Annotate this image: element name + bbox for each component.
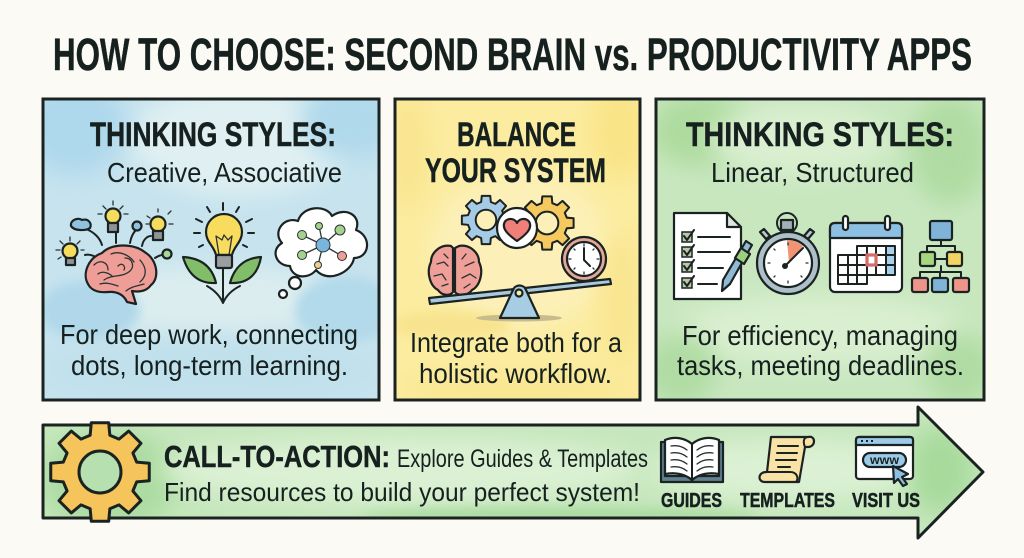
panel body text: tasks, meeting deadlines. <box>677 350 964 381</box>
call-to-action heading: CALL-TO-ACTION: <box>164 439 390 474</box>
label: guides: GUIDES <box>661 490 722 512</box>
panel heading: THINKING STYLES: <box>686 116 954 154</box>
icon: templates scroll <box>759 437 814 482</box>
icon: org chart <box>912 221 969 292</box>
icon: gears with heart <box>462 196 574 250</box>
panel body text: For efficiency, managing <box>682 320 958 351</box>
icon: calendar <box>830 216 902 292</box>
panel body text: Integrate both for a <box>410 327 622 358</box>
icon: visit us browser: www <box>869 453 900 467</box>
arrow banner: call to action <box>40 407 984 538</box>
call-to-action body text: Find resources to build your perfect system! <box>164 477 640 507</box>
icon: guides book <box>661 438 723 482</box>
call-to-action heading: Explore Guides & Templates <box>397 445 648 473</box>
panel body text: dots, long-term learning. <box>71 350 348 381</box>
icon: thought cloud network <box>276 208 367 298</box>
icon: lightbulb sprout <box>183 203 261 303</box>
icon: seesaw with brain and clock <box>429 237 611 322</box>
panel body text <box>410 327 622 389</box>
panel subheading: Linear, Structured <box>711 157 914 188</box>
panel heading: THINKING STYLES: <box>90 116 336 154</box>
panel heading: YOUR SYSTEM <box>425 152 606 190</box>
label: templates: TEMPLATES <box>740 490 835 512</box>
icon: checklist with pen <box>674 213 752 299</box>
panel subheading: Creative, Associative <box>107 157 342 188</box>
panel body text: holistic workflow. <box>419 358 612 389</box>
label: visit us: VISIT US <box>852 490 920 512</box>
panel heading <box>425 116 606 190</box>
panel body text: For deep work, connecting <box>60 319 358 350</box>
panel: creative thinking styles <box>42 98 380 402</box>
icon: stopwatch <box>757 213 819 294</box>
panel body text <box>60 319 358 381</box>
panel: linear thinking styles <box>644 94 996 406</box>
icon: brain with ideas <box>56 201 173 304</box>
panel body text <box>677 320 964 381</box>
panel heading: BALANCE <box>457 116 576 154</box>
call-to-action heading <box>164 439 648 474</box>
icon: visit us browser <box>856 437 913 486</box>
panel: balance your system <box>394 98 642 402</box>
icon: gear <box>51 423 149 521</box>
